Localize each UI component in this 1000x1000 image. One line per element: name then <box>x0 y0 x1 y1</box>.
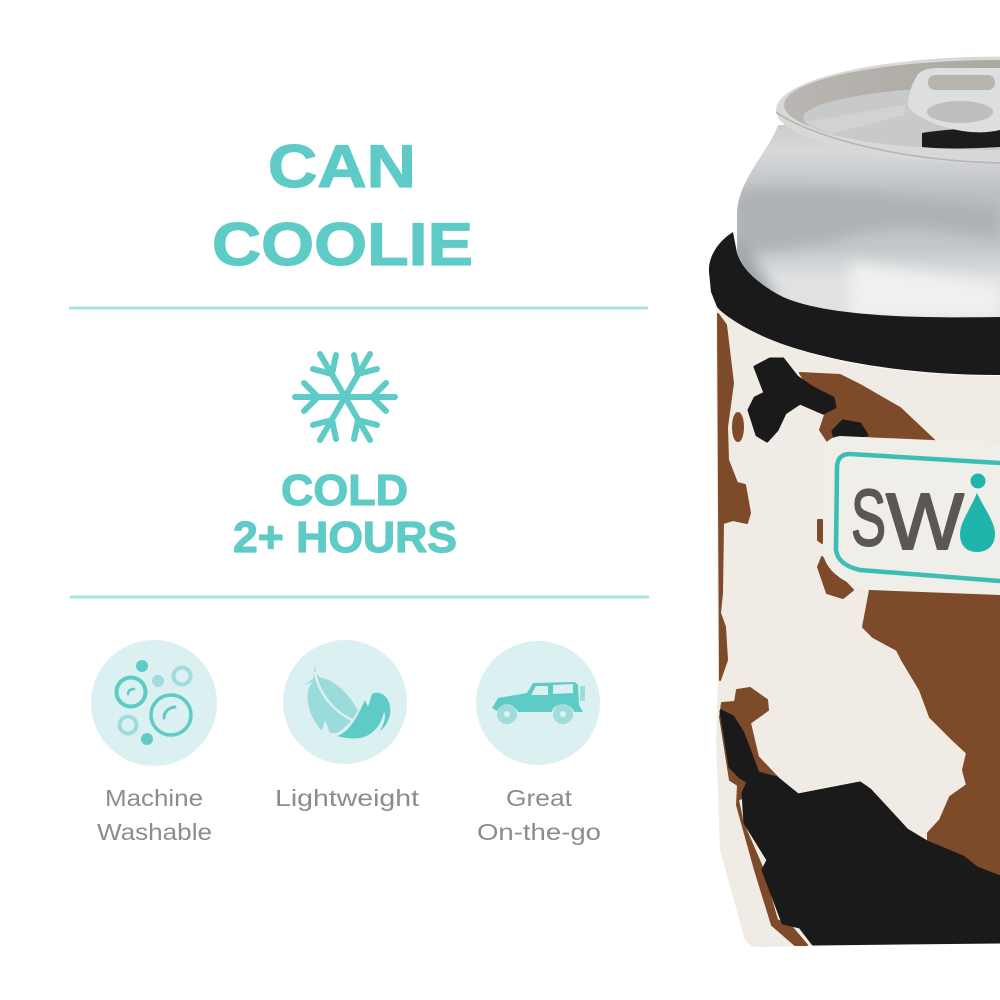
title: CAN <box>268 133 416 200</box>
logo wordmark <box>851 473 995 566</box>
icon label <box>477 785 601 845</box>
icon: lightweight feather <box>283 640 407 764</box>
logo border <box>836 454 1000 581</box>
title: COOLIE <box>212 211 473 278</box>
cold duration text: 2+ HOURS <box>233 513 457 562</box>
icon label: Lightweight <box>275 785 420 811</box>
logo patch <box>823 436 1000 595</box>
icon label: Great <box>506 785 573 811</box>
icon label: On-the-go <box>477 819 601 845</box>
can body <box>730 120 1000 325</box>
icon label: Washable <box>97 819 212 845</box>
can rim and lid <box>776 56 1000 164</box>
icon: great on-the-go vehicle <box>476 641 600 765</box>
logo wordmark: S <box>851 473 886 562</box>
brown patches <box>718 314 1000 945</box>
icon label: Machine <box>105 785 203 811</box>
pull tab <box>922 128 1000 148</box>
product photo: can in coolie <box>709 56 1000 947</box>
black patches <box>721 359 1000 944</box>
coolie body <box>716 308 1000 947</box>
logo wordmark: W <box>886 477 965 566</box>
icon label <box>97 785 212 845</box>
icon: snowflake <box>295 354 395 440</box>
title <box>212 133 473 278</box>
cold duration text <box>233 466 457 562</box>
black collar <box>709 232 1000 375</box>
cold duration text: COLD <box>281 466 408 515</box>
icon: machine washable bubbles <box>91 640 217 766</box>
